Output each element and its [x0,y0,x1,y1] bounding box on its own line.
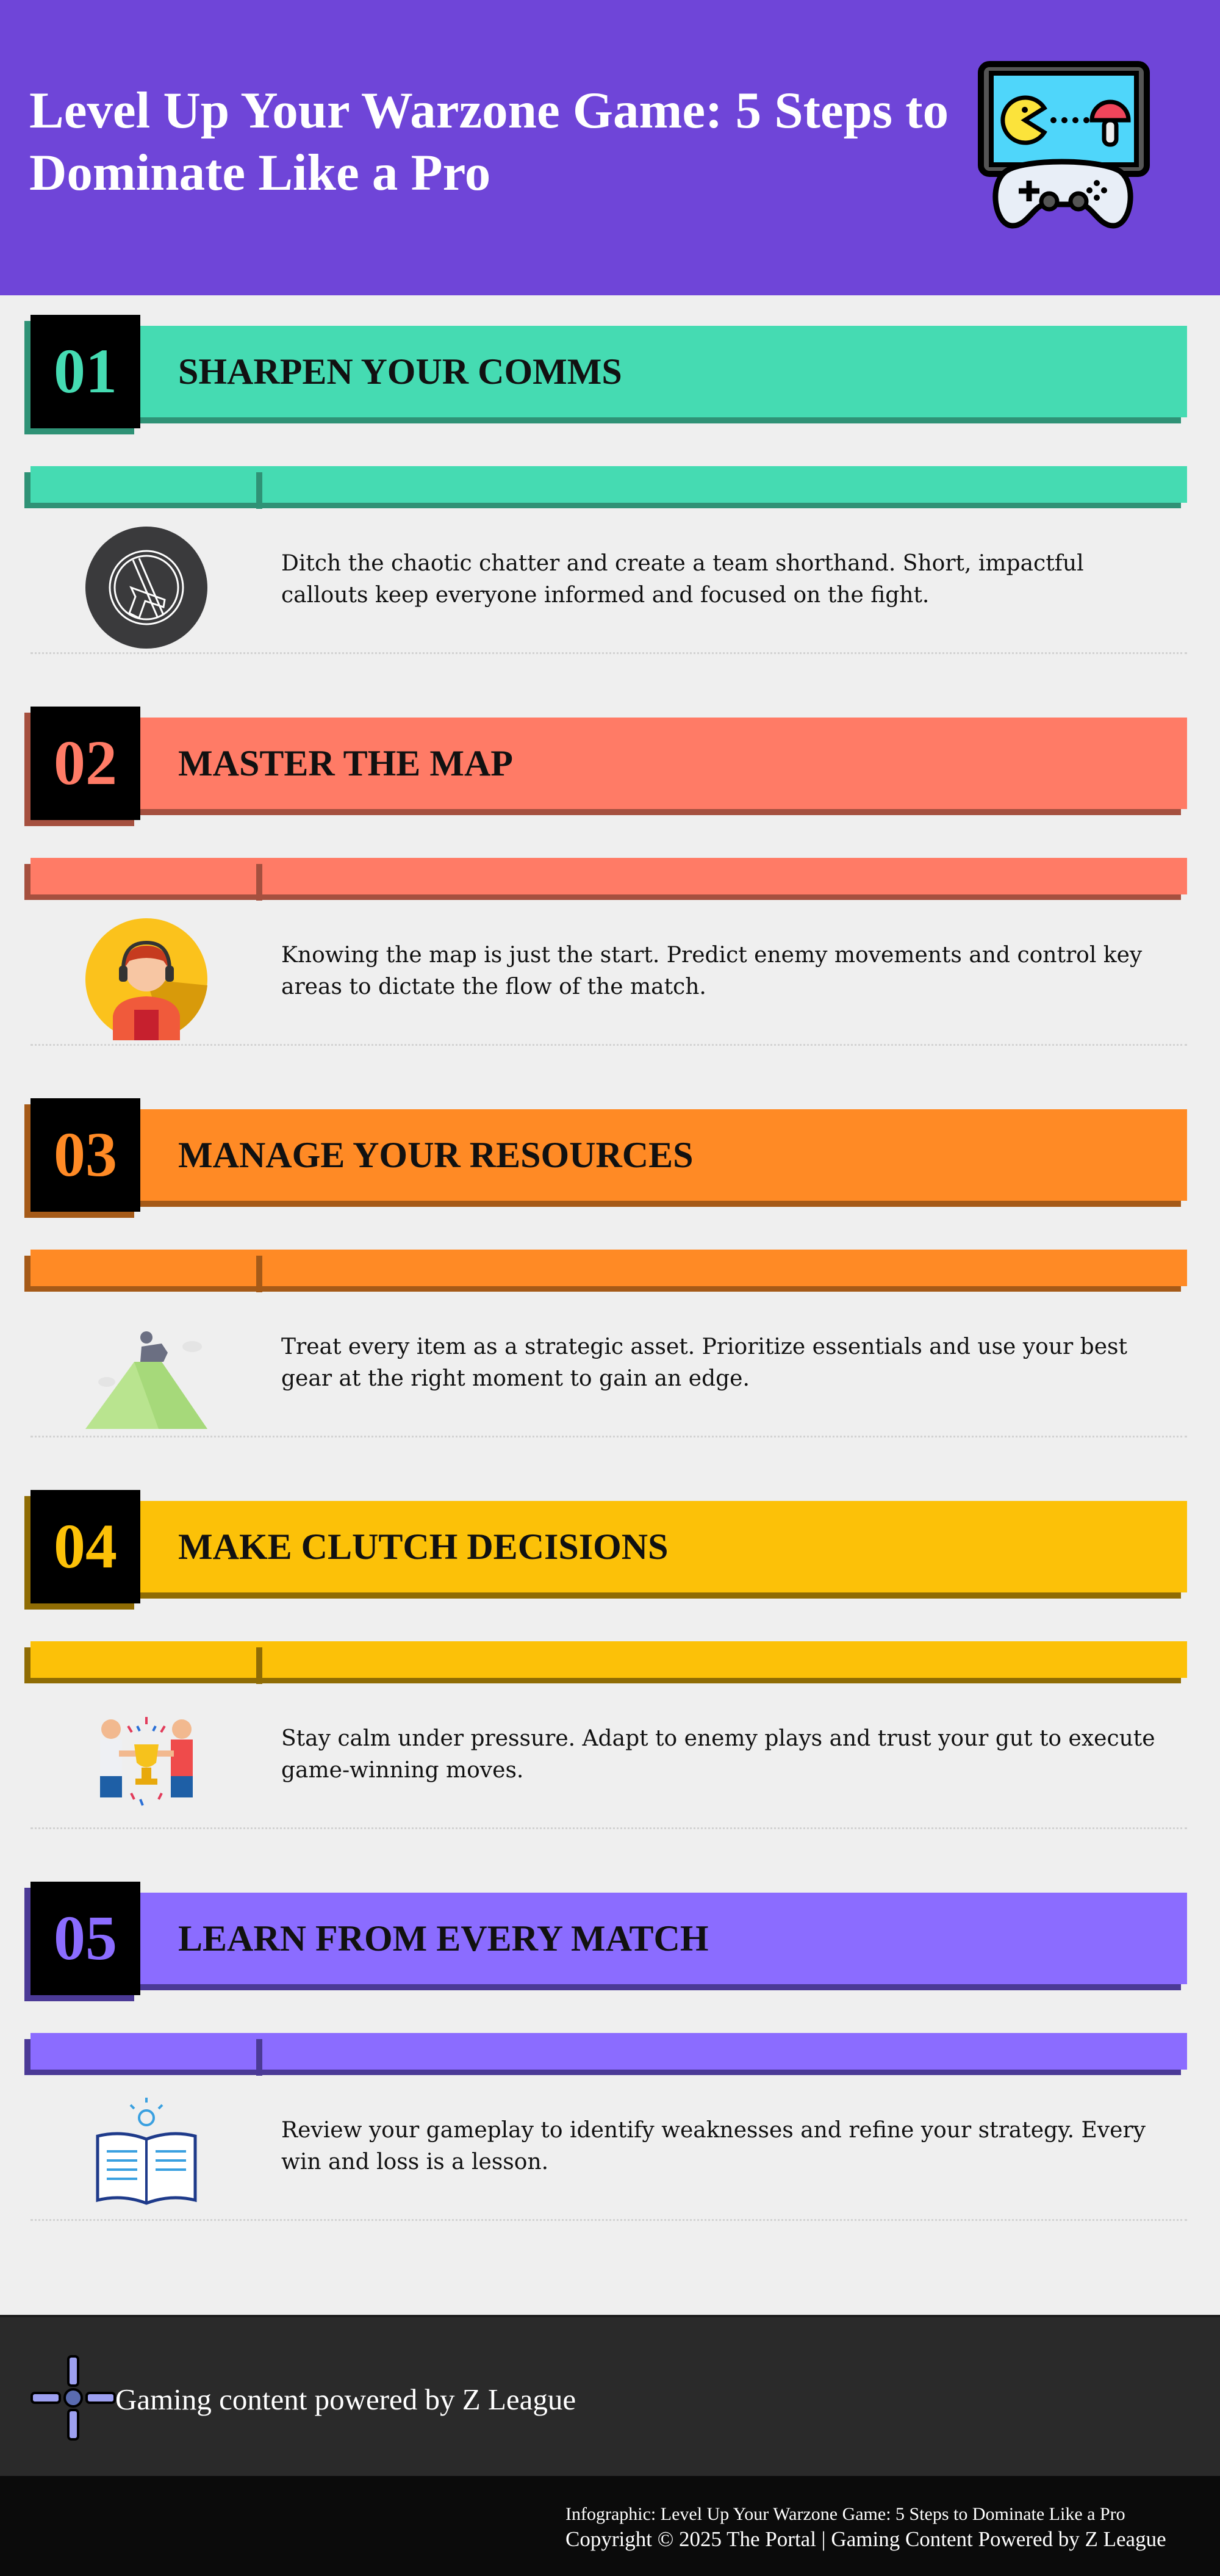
text: Knowing the map is just the start. Predict enemy movements and control key [281,943,1142,968]
number 03 [30,1098,140,1212]
credit text: Infographic: Level Up Your Warzone Game: 5 Steps to Dominate Like a Pro [565,2504,1125,2524]
bottom credits [0,2476,1220,2576]
heading: LEARN FROM EVERY MATCH [178,1918,709,1959]
text: game-winning moves. [281,1758,523,1783]
icon: players with trophy [100,1717,193,1806]
number 01: 01 [54,336,117,406]
icon: game monitor and controller [978,61,1150,228]
header [0,0,1220,295]
text [281,551,1084,608]
icon: dpad cross [30,2355,116,2441]
footer [0,2315,1220,2476]
number 03: 03 [54,1120,117,1190]
number 01 [30,315,140,428]
heading: MAKE CLUTCH DECISIONS [178,1527,668,1567]
section 5 [24,1882,1187,2221]
number 05: 05 [54,1903,117,1973]
number 02: 02 [54,728,117,798]
text [281,2118,1146,2175]
heading: MASTER THE MAP [178,743,513,783]
footer tagline: Gaming content powered by Z League [115,2383,576,2416]
text: Review your gameplay to identify weaknesses and refine your strategy. Every [281,2118,1146,2143]
text: areas to dictate the flow of the match. [281,974,706,999]
title: Dominate Like a Pro [29,144,490,201]
icon: gamer with headset [85,918,207,1040]
text: Treat every item as a strategic asset. Prioritize essentials and use your best [281,1334,1127,1359]
icon: open book with bulb [96,2098,196,2205]
text: win and loss is a lesson. [281,2150,548,2175]
title [29,82,949,201]
title: Level Up Your Warzone Game: 5 Steps to [29,82,949,139]
credit text: Copyright © 2025 The Portal | Gaming Content Powered by Z League [565,2527,1166,2551]
number 02 [30,707,140,820]
text [281,1334,1127,1391]
number 05 [30,1882,140,1995]
text: gear at the right moment to gain an edge. [281,1366,750,1391]
text: Stay calm under pressure. Adapt to enemy plays and trust your gut to execute [281,1726,1155,1751]
text: Ditch the chaotic chatter and create a team shorthand. Short, impactful [281,551,1084,576]
text: callouts keep everyone informed and focused on the fight. [281,583,929,608]
number 04: 04 [54,1511,117,1581]
credit text [565,2504,1166,2551]
text [281,943,1142,999]
section 2 [24,707,1187,1046]
heading: SHARPEN YOUR COMMS [178,351,622,392]
section 1 [24,315,1187,654]
section 4 [24,1490,1187,1829]
icon: no guns sign [85,527,207,649]
icon: mountain with explorer [85,1331,207,1429]
number 04 [30,1490,140,1603]
heading: MANAGE YOUR RESOURCES [178,1135,694,1175]
section 3 [24,1098,1187,1437]
text [281,1726,1155,1783]
